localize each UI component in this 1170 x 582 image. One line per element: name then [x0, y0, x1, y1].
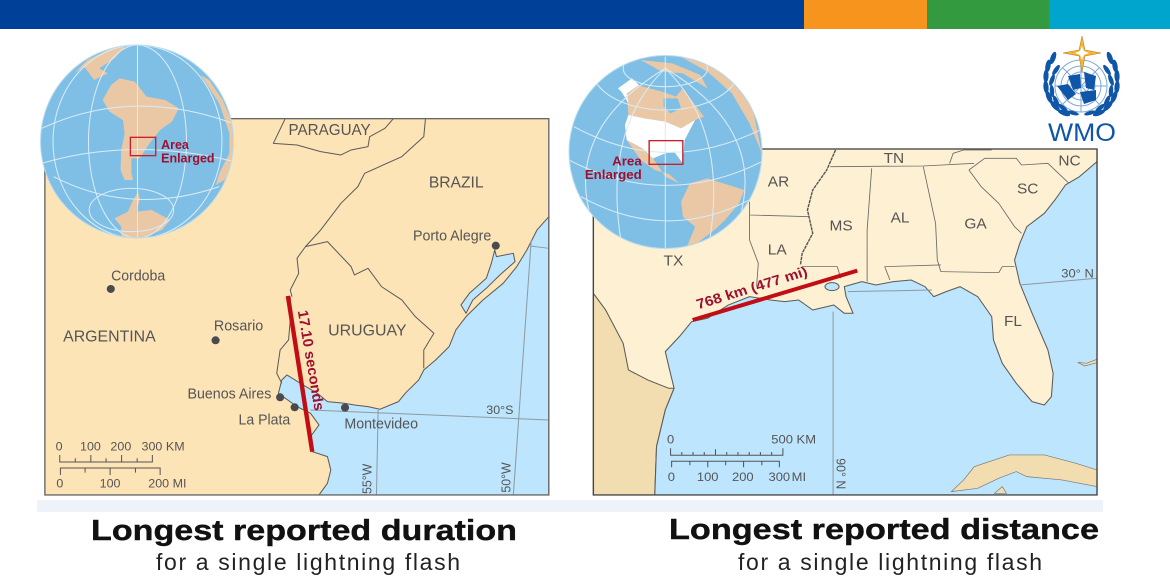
place labels: PARAGUAY — [289, 122, 371, 139]
lake — [825, 283, 839, 291]
scale bars: KM — [166, 440, 185, 454]
flash line — [693, 271, 857, 320]
state borders — [750, 150, 1069, 287]
area label — [162, 140, 214, 165]
map frame — [45, 119, 549, 495]
logo continents — [1057, 72, 1096, 104]
scale bars: 100 — [80, 440, 101, 454]
globe: South America locator — [40, 43, 236, 240]
state labels: AL — [891, 210, 910, 227]
caption backing strip — [37, 500, 1103, 512]
state labels: AR — [768, 174, 789, 190]
place labels: Buenos Aires — [188, 387, 271, 403]
gulf and atlantic — [655, 162, 1097, 495]
state labels: GA — [964, 216, 987, 232]
place labels: Porto Alegre — [413, 229, 491, 245]
place labels: 30°S — [486, 403, 514, 417]
globe grid — [42, 45, 234, 240]
logo star — [1063, 36, 1101, 72]
mexico — [593, 293, 674, 495]
logo laurel wreath right — [1084, 51, 1120, 118]
scale bars: 0 — [56, 440, 63, 454]
header colour bar — [0, 0, 1170, 29]
lagoon — [461, 250, 515, 313]
logo wordmark: WMO — [1048, 119, 1116, 147]
scale bars: 300 — [142, 440, 162, 454]
highlighted united states — [618, 78, 695, 163]
state labels: SC — [1017, 181, 1039, 197]
place labels: Montevideo — [344, 416, 418, 432]
flash line — [288, 296, 312, 452]
caption: distance: Longest reported distance — [669, 514, 1099, 546]
scale bars: MI — [173, 477, 187, 491]
logo emblem rings — [1055, 60, 1107, 112]
WMO logo — [1043, 36, 1120, 147]
borders and rivers — [273, 119, 434, 383]
area label: Enlarged — [585, 167, 642, 182]
map land background — [593, 149, 1097, 495]
globe land — [74, 43, 236, 238]
scale bars: 200 — [110, 440, 131, 454]
area label — [586, 156, 642, 182]
scale bars: 0 — [667, 433, 674, 447]
area box — [649, 141, 683, 164]
place labels — [63, 122, 514, 494]
caption: duration: Longest reported duration — [91, 515, 517, 547]
flash label: 17.10 seconds — [294, 309, 327, 412]
scale bars: 200 — [732, 470, 754, 484]
sea — [278, 217, 549, 495]
area box — [130, 137, 156, 156]
hudson bay — [664, 98, 681, 113]
state labels: TX — [664, 253, 683, 270]
place labels: 55°W — [360, 463, 374, 494]
area label: Enlarged — [161, 150, 215, 165]
globe grid — [570, 56, 761, 248]
map frame — [593, 149, 1097, 495]
flash label: 768 km (477 mi) — [694, 264, 810, 313]
caption: duration — [91, 515, 517, 575]
graticule lines — [311, 240, 549, 495]
place labels: ARGENTINA — [63, 329, 156, 346]
state labels: 90° N — [834, 458, 848, 489]
scale bars — [667, 433, 816, 484]
panel: longest distance map — [593, 149, 1097, 495]
caption: distance — [669, 514, 1099, 575]
place labels: URUGUAY — [328, 322, 407, 339]
scale bars: 300 — [768, 470, 790, 484]
mississippi river — [800, 150, 836, 265]
scale bars: 0 — [668, 470, 675, 484]
state labels: FL — [1004, 313, 1022, 330]
scale bars — [56, 440, 187, 491]
state labels: LA — [768, 242, 787, 258]
state labels: MS — [830, 218, 853, 235]
area label: Area — [161, 137, 190, 152]
place labels: 50°W — [500, 462, 514, 493]
place labels: La Plata — [239, 412, 291, 428]
panel: longest duration map — [45, 119, 549, 495]
scale bars: 0 — [56, 477, 63, 491]
caption: distance: for a single lightning flash — [738, 549, 1042, 575]
scale bars: 500 KM — [771, 433, 816, 447]
place labels: BRAZIL — [429, 175, 484, 192]
scale bars: 100 — [100, 477, 121, 491]
area label: Area — [612, 154, 643, 169]
city dots — [107, 242, 500, 412]
caption: duration: for a single lightning flash — [156, 549, 460, 575]
cuba and islands — [951, 359, 1097, 493]
state labels: NC — [1058, 153, 1081, 170]
place labels: Cordoba — [111, 268, 166, 284]
scale bars: MI — [792, 470, 806, 484]
map land background — [45, 119, 549, 495]
scale bars: 200 — [148, 477, 169, 491]
graticule lines — [833, 278, 1097, 495]
state labels — [664, 150, 1094, 489]
logo laurel wreath left — [1043, 51, 1079, 118]
scale bars: 100 — [697, 470, 719, 484]
state labels: TN — [884, 150, 904, 167]
place labels: Rosario — [214, 319, 263, 335]
globe land — [627, 56, 762, 248]
state labels: 30° N — [1061, 267, 1094, 280]
globe: North America locator — [568, 55, 762, 249]
